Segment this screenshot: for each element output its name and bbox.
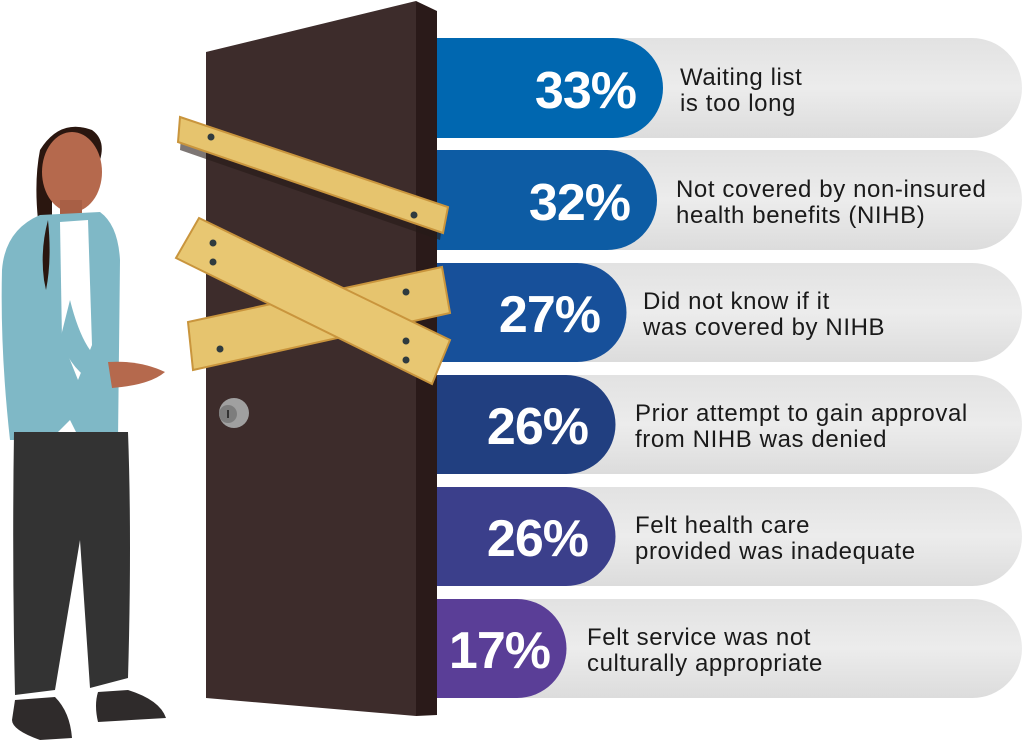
row 5: [437, 487, 1022, 586]
row 2: health benefits (NIHB): [676, 202, 925, 229]
door knob: [219, 398, 249, 428]
row 5: provided was inadequate: [635, 538, 916, 565]
row 1: is too long: [680, 90, 796, 117]
shoes: [12, 697, 72, 740]
row 6: Felt service was not: [587, 624, 811, 651]
row 1: [437, 38, 1022, 138]
row 6: [437, 599, 1022, 698]
row 2: Not covered by non-insured: [676, 176, 986, 203]
row 4: from NIHB was denied: [635, 426, 887, 453]
row 5: Felt health care: [635, 512, 810, 539]
wooden boards: [176, 117, 450, 384]
pants: [13, 432, 130, 695]
row 3: [437, 263, 1022, 362]
shirt: [2, 212, 120, 440]
row 4: Prior attempt to gain approval: [635, 400, 968, 427]
row 1: Waiting list: [680, 64, 802, 91]
row 6: culturally appropriate: [587, 650, 823, 677]
row 3: 27%: [499, 286, 600, 344]
door: [206, 1, 437, 716]
braid/hair: [36, 127, 102, 290]
row 6: 17%: [449, 622, 550, 680]
head: [42, 132, 102, 212]
row 5: 26%: [487, 510, 588, 568]
hand: [108, 362, 165, 388]
row 3: was covered by NIHB: [642, 314, 885, 341]
row 2: [437, 150, 1022, 250]
arm: [60, 300, 120, 385]
row 4: [437, 375, 1022, 474]
row 1: 33%: [535, 62, 636, 120]
row 4: 26%: [487, 398, 588, 456]
row 2: 32%: [529, 174, 630, 232]
row 3: Did not know if it: [643, 288, 830, 315]
person: [2, 127, 166, 740]
